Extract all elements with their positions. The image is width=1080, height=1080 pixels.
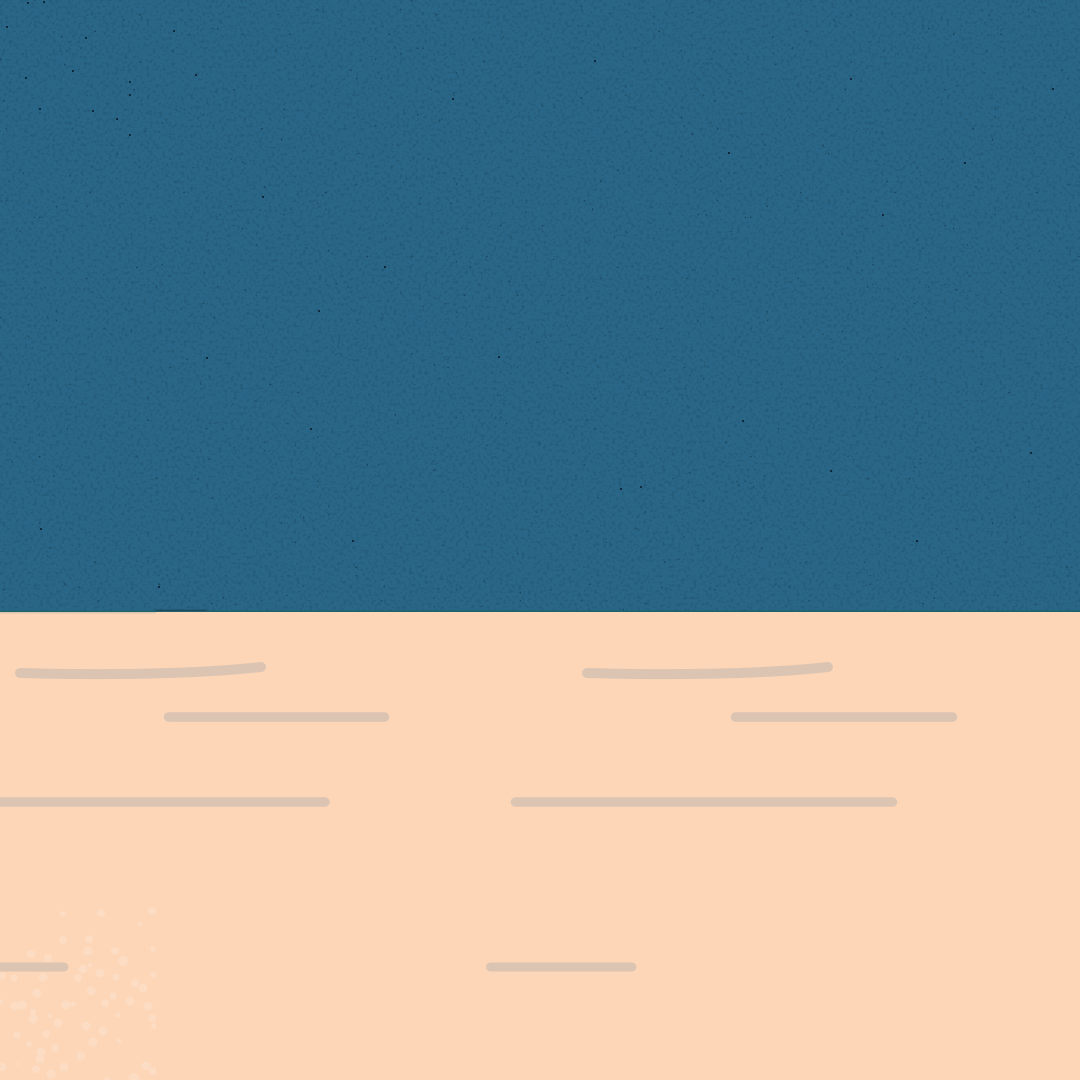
brush strokes: right group [490,667,952,967]
panel: sand lower field [0,610,1080,1080]
stroke: upper right [736,712,952,722]
stroke: lower right [490,962,632,972]
stroke: curved top left [20,667,261,674]
stroke: middle right [516,797,892,807]
stroke: curved top right [587,667,828,674]
stroke: upper left [168,712,384,722]
panel: blue upper field [0,0,1080,612]
stroke: middle left [0,797,325,807]
brush strokes: left group [0,667,384,967]
stroke: lower left [0,962,64,972]
dot cluster: pale spots bottom left [0,907,157,1080]
